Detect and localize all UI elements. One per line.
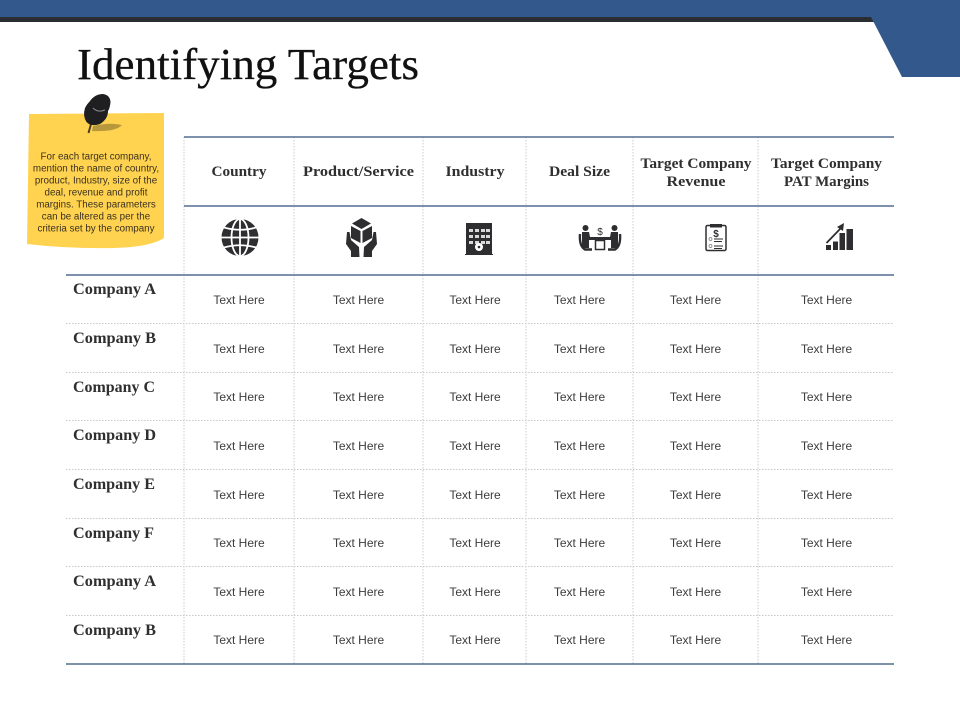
title: Identifying Targets [77, 40, 419, 89]
table cell text: Text Here [333, 585, 384, 599]
table cell text: Text Here [801, 536, 852, 550]
table cell text: Text Here [449, 633, 501, 647]
icon: deal meeting: $ [597, 227, 603, 238]
table cell text: Text Here [333, 439, 384, 453]
table cell text: Text Here [801, 342, 852, 356]
table cell text: Text Here [449, 488, 501, 502]
table cell text: Text Here [333, 488, 384, 502]
table cell text: Text Here [213, 536, 265, 550]
table cell text: Text Here [554, 342, 605, 356]
table cell text: Text Here [213, 439, 265, 453]
row labels: Company C [73, 379, 155, 396]
table cell text: Text Here [449, 585, 501, 599]
column headers: Industry [446, 163, 505, 180]
icon: globe [221, 219, 259, 256]
row labels: Company E [73, 476, 155, 493]
table cell text: Text Here [333, 293, 384, 307]
icon: deal meeting [580, 225, 620, 250]
table cell text: Text Here [670, 342, 721, 356]
sticky note [27, 94, 164, 248]
table cell text: Text Here [554, 488, 605, 502]
table cell text: Text Here [449, 342, 501, 356]
table cell text: Text Here [449, 439, 501, 453]
table cell text: Text Here [801, 439, 852, 453]
note text [33, 152, 159, 234]
note text: margins. These parameters [36, 200, 156, 210]
table cell text: Text Here [554, 536, 605, 550]
row labels [73, 281, 157, 639]
icon: hands holding box [346, 218, 377, 257]
table cell text: Text Here [213, 390, 265, 404]
row labels: Company B [73, 622, 156, 639]
row labels: Company A [73, 281, 157, 298]
table grid [66, 137, 894, 664]
note text: For each target company, [41, 152, 151, 162]
table cell text: Text Here [449, 390, 501, 404]
table cell text [213, 293, 852, 647]
column headers: Country [212, 163, 267, 180]
table cell text: Text Here [670, 488, 721, 502]
table cell text: Text Here [213, 585, 265, 599]
row labels: Company A [73, 573, 157, 590]
table cell text: Text Here [449, 293, 501, 307]
table cell text: Text Here [801, 390, 852, 404]
pin shadow [92, 124, 122, 131]
table cell text: Text Here [670, 439, 721, 453]
icon: growth chart [826, 223, 853, 250]
table cell text: Text Here [213, 633, 265, 647]
table cell text: Text Here [554, 390, 605, 404]
icon: push pin [84, 94, 110, 133]
note text: can be altered as per the [42, 212, 151, 222]
table cell text: Text Here [670, 536, 721, 550]
column headers: Target Company [771, 155, 882, 172]
table cell text: Text Here [554, 633, 605, 647]
column headers: Target Company [640, 155, 752, 172]
table cell text: Text Here [670, 293, 721, 307]
note text: mention the name of country, [33, 164, 159, 174]
note text: criteria set by the company [37, 224, 155, 234]
table cell text: Text Here [333, 342, 384, 356]
table cell text: Text Here [801, 585, 852, 599]
column headers: Revenue [666, 173, 726, 190]
table cell text: Text Here [554, 439, 605, 453]
icon: office building [465, 223, 493, 255]
table cell text: Text Here [801, 633, 852, 647]
table cell text: Text Here [213, 342, 265, 356]
column headers: PAT Margins [784, 173, 869, 190]
top banner [0, 0, 960, 77]
column headers: Deal Size [549, 163, 610, 180]
table cell text: Text Here [801, 293, 852, 307]
note text: deal, revenue and profit [45, 188, 148, 198]
table cell text: Text Here [554, 585, 605, 599]
table cell text: Text Here [670, 633, 721, 647]
column headers [212, 155, 882, 190]
column headers: Product/Service [303, 163, 414, 180]
row labels: Company F [73, 525, 154, 542]
table cell text: Text Here [670, 390, 721, 404]
table cell text: Text Here [333, 536, 384, 550]
table cell text: Text Here [670, 585, 721, 599]
note text: product, Industry, size of the [35, 176, 158, 186]
table cell text: Text Here [449, 536, 501, 550]
table cell text: Text Here [554, 293, 605, 307]
table cell text: Text Here [333, 390, 384, 404]
row labels: Company D [73, 427, 156, 444]
table cell text: Text Here [333, 633, 384, 647]
table cell text: Text Here [213, 293, 265, 307]
table cell text: Text Here [801, 488, 852, 502]
table cell text: Text Here [213, 488, 265, 502]
row labels: Company B [73, 330, 156, 347]
icon: clipboard with dollar [706, 224, 726, 250]
icon: clipboard with dollar: $ [713, 229, 719, 240]
